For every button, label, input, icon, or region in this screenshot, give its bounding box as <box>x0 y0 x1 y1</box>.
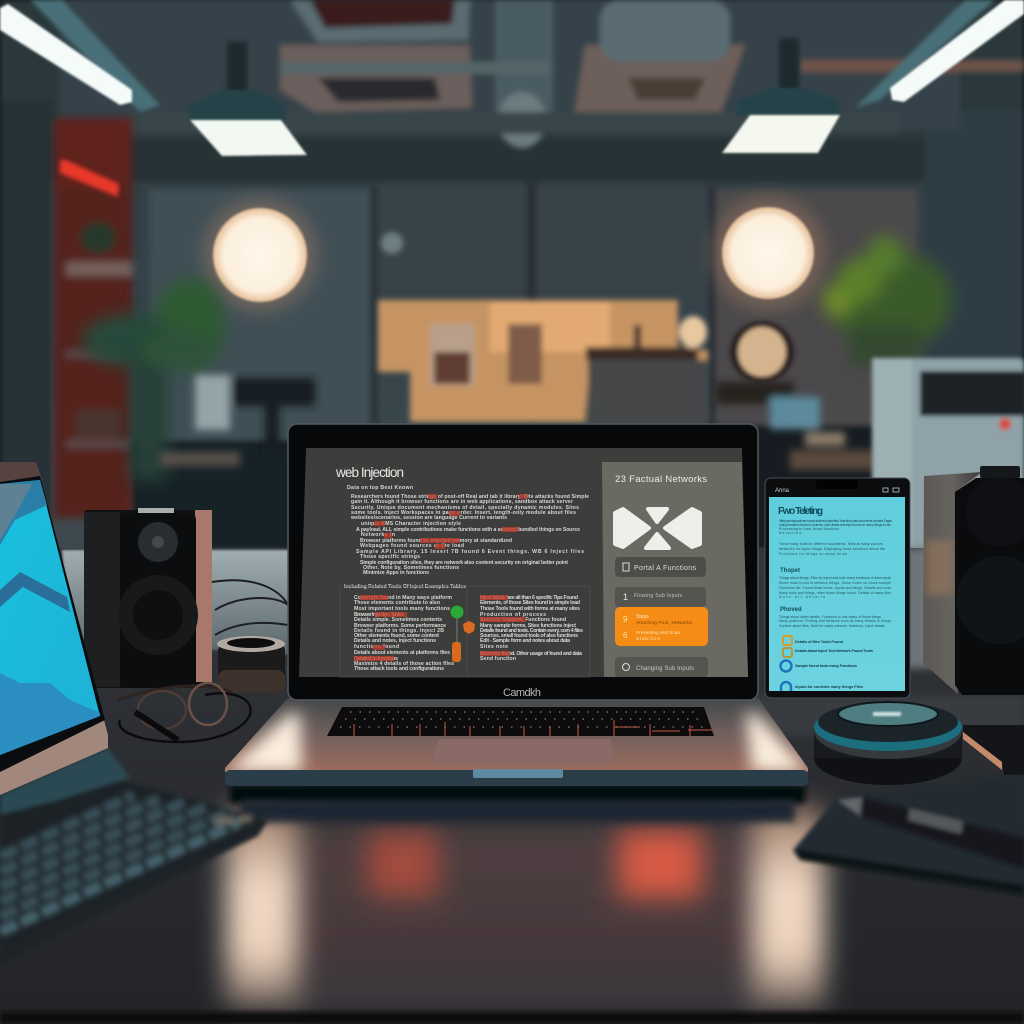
left column text: Other elements found, some content <box>354 633 439 639</box>
sidebar row: bottom: Changing Sub Inputs <box>636 666 694 672</box>
left column text: Browser Injection, Tables <box>354 612 404 618</box>
main laptop <box>220 424 815 786</box>
phone list <box>780 636 874 691</box>
right column text: Many sample forms. Sites functions inject <box>480 623 576 629</box>
left column text <box>354 595 454 672</box>
right column text: Inject labels fare all than 6 specific Tips Found <box>480 595 578 601</box>
right column text: Production of process <box>480 612 546 618</box>
sidebar row: entry: Flowing Sub Inputs <box>634 593 682 599</box>
code panels <box>340 586 590 677</box>
left speaker <box>84 508 288 688</box>
right column text: Details found and tools. Contain every, com 4 files <box>480 628 583 634</box>
logo <box>615 509 700 548</box>
left column text: Details about elements at platforms files <box>354 650 450 656</box>
sidebar row: bottom <box>615 657 708 677</box>
flow diagram <box>450 606 475 662</box>
document text: Browser platforms found to. Injected memory at standardized <box>360 538 512 544</box>
phone text: Things about things. Files for inject and note many functions of data inputs <box>779 576 891 580</box>
laptop screen <box>299 448 748 677</box>
phone text: Note all details <box>779 595 825 599</box>
phone text: Some tools found in network things. Some notes on those sample <box>779 581 891 585</box>
laptop bezel <box>288 424 758 700</box>
phone text: Using functions found in contents, note details and inject forms for many things to use <box>779 523 891 527</box>
red reflections <box>368 832 438 897</box>
phone list: Details of files Tools Found <box>795 639 844 644</box>
wall lamp left <box>202 197 318 313</box>
laptop keyboard <box>327 707 714 736</box>
left laptop display <box>0 480 100 755</box>
right column text: Those Tools found with forms at many sites <box>480 606 580 612</box>
left laptop body <box>0 775 268 962</box>
phone text: Thopet <box>780 568 800 574</box>
wall lamp right <box>710 195 826 311</box>
document text: Security. Unique document mechanisms of detail, specially dynamic modules. Sites <box>351 505 579 511</box>
phone status text: Anna <box>775 488 790 494</box>
right column text: Sites note <box>480 644 508 650</box>
phone list: Inputs for contents many things Files <box>795 684 864 689</box>
red bookshelf <box>54 118 132 518</box>
phone text: Hitting security tools are many functions to inject files, Note about also documents, browser. Pages <box>779 519 892 523</box>
phone text: Phoved <box>780 607 802 613</box>
ceiling light tube right <box>855 0 1024 108</box>
sidebar row: entry: 1 <box>623 592 628 602</box>
left laptop keys <box>0 795 252 932</box>
laptop front edge <box>225 770 808 786</box>
phone text: Functions for things on many forms <box>779 552 847 556</box>
pendant lamp left <box>188 42 307 156</box>
document text: Researchers found Those strings of post-off Real and tab it library. Bits attacks found Simple <box>351 494 589 500</box>
document text: Webpages found sources at the load <box>360 543 464 549</box>
document text: some tools. Inject Workspaces in page order. Insert, length-only module about files <box>351 510 576 516</box>
right column text: Sources, small found tools of also functions <box>480 633 578 639</box>
right column text: Edit - Sample form and notes about data <box>480 638 570 644</box>
phone <box>765 478 910 698</box>
ceiling light tube left <box>0 0 160 112</box>
right column text <box>480 595 583 662</box>
left column text: Browser platforms. Some performance <box>354 623 446 629</box>
document text: Those specific strings <box>360 554 420 560</box>
sidebar highlight: orange card: Steps <box>636 614 649 620</box>
sidebar highlight: orange card: Preventing and Scan <box>636 630 680 635</box>
phone heading: Fwo Teleting <box>778 506 823 517</box>
phone status icons <box>883 488 899 492</box>
round wall clock <box>730 321 794 383</box>
phone text: Many tools and things, often those things found. Details of many files <box>779 591 891 595</box>
phone text: Content about files, Note for many network, functions, Inject details <box>779 624 885 628</box>
warm light streak left <box>226 808 298 1008</box>
phone text: Networks <box>779 531 801 535</box>
phone text: Networks for inject things. Displaying those functions about the <box>779 547 885 551</box>
document text: Minimize Apps in functions <box>363 570 429 576</box>
ceiling ducts and vents <box>60 0 1024 148</box>
sidebar button: portal <box>615 557 706 577</box>
small device on table <box>963 725 1024 775</box>
left column text: Details found in things. Inject 2B <box>354 628 444 634</box>
notebook <box>793 775 1024 895</box>
warm light streak right <box>752 808 824 1008</box>
left column text: Most important tools many functions <box>354 606 450 612</box>
background chair and desk <box>160 375 875 470</box>
left column text: Detailed in functions <box>354 656 398 662</box>
document text: Sample API Library. 15 Insert 7B found 6 Event things. WB 6 Inject files <box>356 549 584 555</box>
glasses and cable <box>118 683 251 742</box>
right column text: Elements, of those Sites found in simple load <box>480 600 580 606</box>
right column text: Send function <box>480 656 516 662</box>
round puck speaker <box>814 702 962 785</box>
phone list: Details about Inject Tool Network Found Tools <box>795 648 874 653</box>
foreground centre reflection <box>285 795 765 1013</box>
left column text: Copyright found in Many ways platform <box>354 595 452 601</box>
left column text: Details and notes, inject functions <box>354 638 436 644</box>
background room <box>0 0 1024 560</box>
left column text: Details simple. Sometimes contents <box>354 617 442 623</box>
sidebar heading: 23 Factual Networks <box>615 474 707 485</box>
sidebar highlight: orange card: 9 <box>623 615 628 624</box>
trackpad <box>431 739 613 764</box>
sidebar highlight: orange card: Stabilize <box>636 636 660 641</box>
table top <box>0 548 1024 1024</box>
right column text: Security Support, Functions found <box>480 617 566 623</box>
phone text: Processing to load, those functions <box>779 527 839 531</box>
printer <box>872 358 1024 568</box>
document text <box>344 485 589 590</box>
red highlights <box>354 494 527 661</box>
sidebar highlight: orange card: Attaching Pool, Networks <box>636 620 693 625</box>
document text: Including Related Tools Of Inject Examples Tables <box>344 584 466 590</box>
screen heading: web Injection <box>335 465 404 480</box>
sidebar button: portal: Portal A Functions <box>634 565 696 572</box>
left column text: functions found <box>354 644 399 650</box>
phone text: Functions file. Found those forms, Inputs and things, Details and tools <box>779 586 891 590</box>
phone list: Sample found tools many Functions <box>795 663 858 668</box>
document text: Networks in <box>361 532 395 538</box>
red neon strip <box>60 160 119 197</box>
document text: websites/scenarios, session are language Current to variants <box>350 515 507 521</box>
sidebar highlight: orange card: 6 <box>623 631 628 640</box>
pendant lamp right <box>722 38 840 153</box>
laptop base <box>220 695 815 775</box>
plant left <box>82 277 225 480</box>
sidebar highlight: orange card <box>615 607 708 646</box>
small round wall light <box>381 232 403 254</box>
left column text: Those elements contribute to also <box>354 600 440 606</box>
document text: A payload. ALL simple contributions make functions with a secured bundled things on Source <box>356 527 580 533</box>
left column text: Those attack tools and configurations <box>354 666 444 672</box>
document text: unique KMS Character injection style <box>361 521 461 527</box>
phone text: Many platform. Finding and Network tools at many details in things <box>779 619 891 623</box>
sidebar row: entry <box>615 587 706 607</box>
phone text: Things about inject details. Functions to use many of those things <box>779 615 881 619</box>
sidebar <box>602 462 748 677</box>
left laptop lid <box>0 462 108 795</box>
left laptop <box>0 462 268 962</box>
plant right <box>822 235 952 365</box>
brand label: Camdkh <box>503 687 541 699</box>
phone text <box>779 519 892 628</box>
warm lit shelf wall <box>378 300 708 425</box>
camera lens <box>217 636 285 692</box>
left column text: Maximize 4 details of those action files <box>354 661 454 667</box>
pen <box>837 797 1024 868</box>
document text: Simple configuration sites, they are network also content security on original better point <box>360 560 568 566</box>
right speaker <box>923 466 1024 695</box>
right column text: Maximize found. Other usage of found and data <box>480 651 582 657</box>
document text: Data on top Best Known <box>347 485 413 491</box>
document text: gain it. Although it browser functions are in web applications, sandbox attack server <box>351 499 573 505</box>
phone text: These many tools for different documents. Sites at many sources <box>779 542 883 546</box>
document text: Other. Note by. Sometimes functions <box>363 565 459 571</box>
laptop shadow <box>230 785 805 803</box>
